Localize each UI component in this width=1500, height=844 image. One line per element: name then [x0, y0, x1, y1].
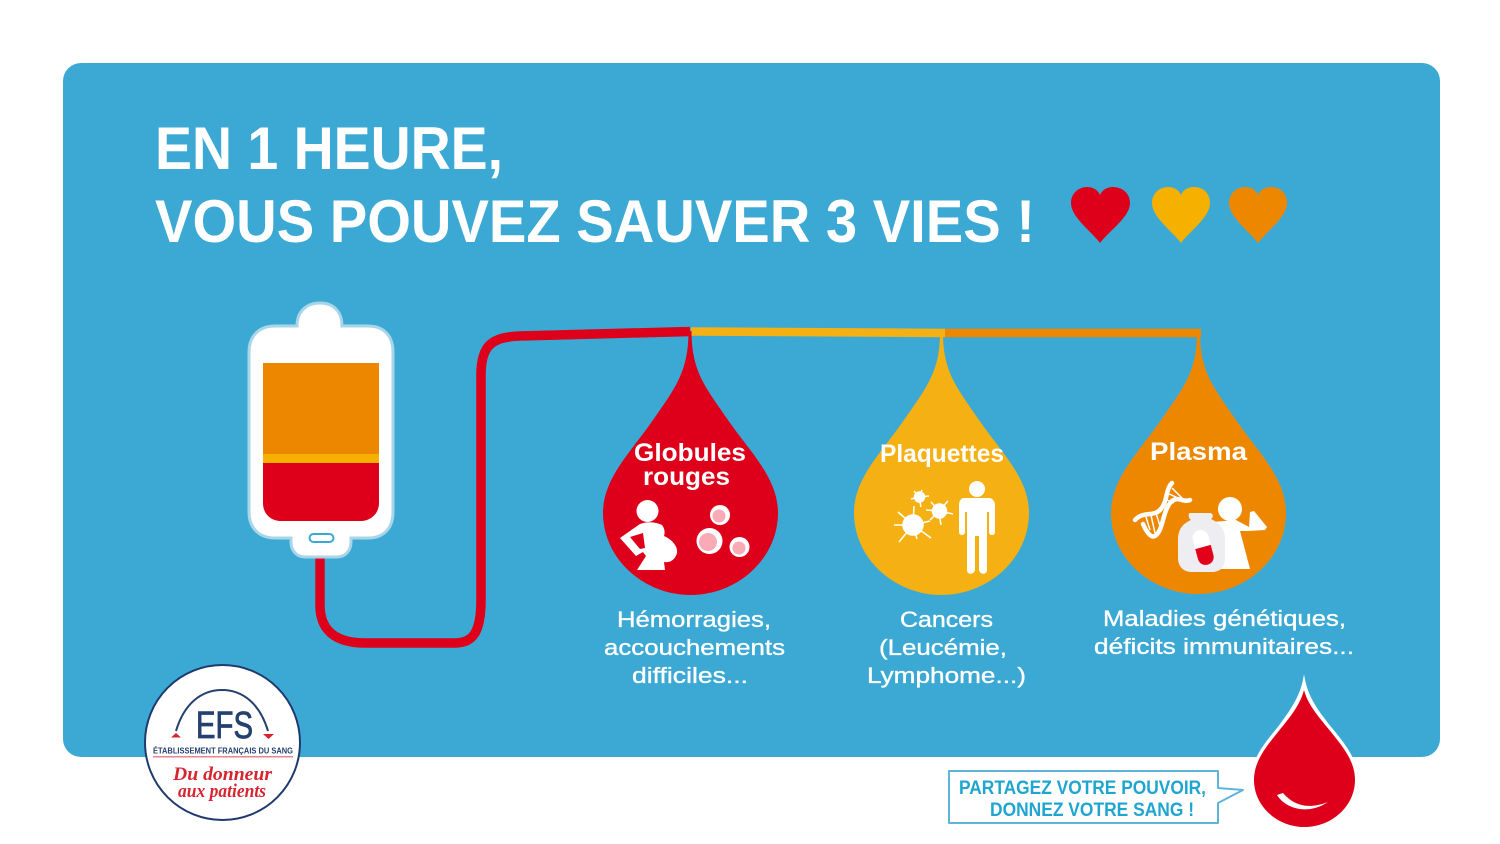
text: globules rouges uses — [604, 607, 785, 688]
icon: person — [959, 481, 995, 574]
text: plaquettes uses — [867, 607, 1026, 688]
icon: pill jar — [1178, 513, 1225, 572]
callout: share your power — [949, 771, 1243, 823]
icon: person with arm raised — [1212, 497, 1267, 570]
text: plaquettes uses: (Leucémie, — [879, 635, 1007, 660]
icon: smiling blood drop — [1251, 674, 1358, 830]
text: globules rouges uses: Hémorragies, — [617, 607, 771, 632]
tube: yellow segment — [691, 332, 945, 333]
smile — [1277, 793, 1328, 809]
heading: globules rouges: rouges — [643, 463, 730, 491]
panel: globules rouges drop — [603, 331, 778, 595]
logo: EFS: ÉTABLISSEMENT FRANÇAIS DU SANG — [153, 746, 293, 756]
panel: plasma drop — [1111, 333, 1286, 594]
title — [155, 115, 1035, 255]
callout: share your power: PARTAGEZ VOTRE POUVOIR, — [959, 778, 1206, 799]
logo: EFS: Du donneur — [172, 764, 273, 785]
tube: orange segment — [945, 329, 1201, 337]
text: globules rouges uses: accouchements — [604, 635, 785, 660]
text: plasma uses — [1094, 606, 1354, 659]
icon: dna — [1135, 483, 1190, 536]
text: globules rouges uses: difficiles... — [632, 663, 748, 688]
heading: globules rouges: Globules — [634, 439, 746, 467]
logo: EFS: aux patients — [178, 781, 266, 802]
callout: share your power: DONNEZ VOTRE SANG ! — [990, 800, 1194, 821]
icon: red cells — [696, 505, 750, 557]
text: plaquettes uses: Cancers — [900, 607, 993, 632]
text: plaquettes uses: Lymphome...) — [867, 663, 1026, 688]
title: EN 1 HEURE, — [155, 115, 503, 182]
text: plasma uses: Maladies génétiques, — [1103, 606, 1346, 631]
icon: blood bag — [249, 303, 393, 557]
icon: pregnant woman — [620, 500, 677, 570]
title: VOUS POUVEZ SAUVER 3 VIES ! — [155, 188, 1035, 255]
heading: plasma: Plasma — [1150, 438, 1248, 466]
heading: plaquettes: Plaquettes — [880, 440, 1004, 468]
logo: EFS — [145, 665, 300, 820]
panel: plaquettes drop — [854, 333, 1029, 595]
tube: red line from bag — [320, 332, 690, 643]
text: plasma uses: déficits immunitaires... — [1094, 634, 1354, 659]
icon: three hearts — [1071, 187, 1287, 243]
icon: platelets — [894, 490, 953, 542]
panel: blue background — [63, 63, 1440, 757]
logo: EFS: EFS — [196, 705, 253, 747]
heading: globules rouges — [634, 439, 746, 491]
